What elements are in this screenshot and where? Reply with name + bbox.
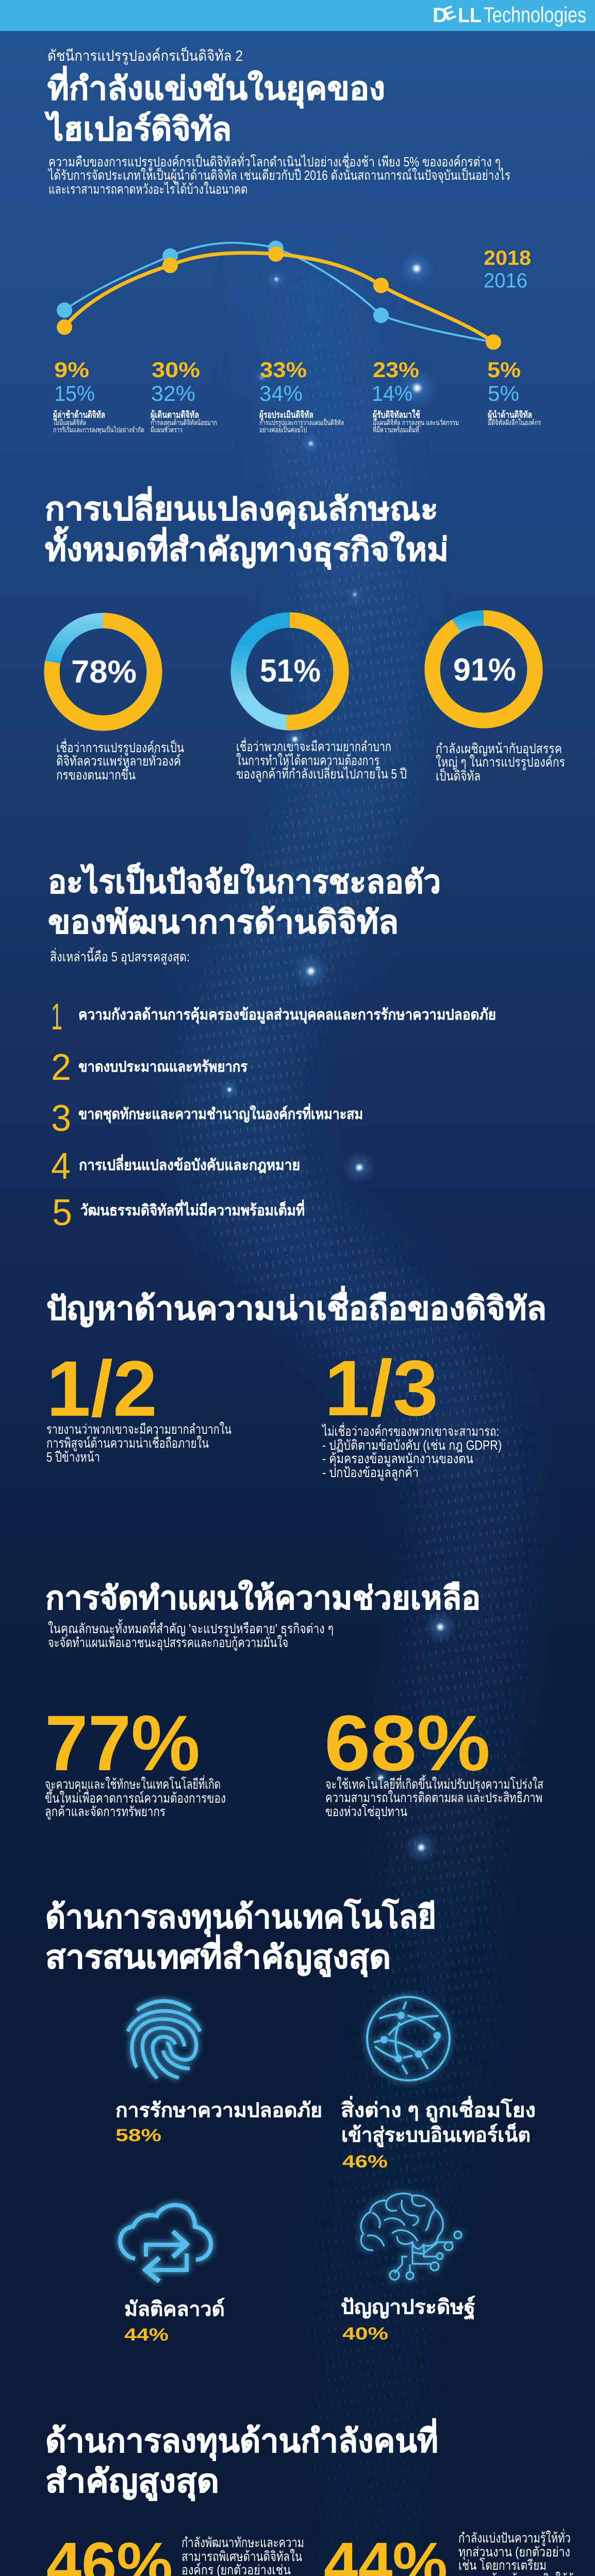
- maturity stage: digital followers: การลงทุนด้านดิจิทัลน้อยมาก: [151, 418, 217, 427]
- stat: one third: [321, 1344, 502, 1481]
- maturity stage: digital followers: [151, 358, 217, 434]
- icon: AI brain: [361, 2193, 461, 2280]
- stat: 68%: ของห่วงโซ่อุปทาน: [325, 1804, 407, 1820]
- stat: one third: - ปกป้องข้อมูลลูกค้า: [322, 1465, 419, 1481]
- maturity stage: digital leaders: ผู้นำด้านดิจิทัล: [488, 410, 532, 421]
- maturity stage: digital followers: ผู้เดินตามดิจิทัล: [151, 410, 199, 421]
- label: multi-cloud: มัลติคลาวด์: [124, 2297, 225, 2320]
- icon: multi-cloud: [120, 2205, 211, 2281]
- maturity stage: digital laggards: [53, 358, 144, 434]
- barrier 1: 1: [51, 996, 62, 1038]
- header bar: [0, 0, 595, 31]
- section heading: digital trust: ปัญหาด้านความน่าเชื่อถือของดิจิทัล: [46, 1286, 547, 1327]
- stat: one half: การพิสูจน์ด้านความน่าเชื่อถือภายใน: [46, 1434, 209, 1451]
- intro paragraph: ความคืบของการแปรรูปองค์กรเป็นดิจิทัลทั่วโลกดำเนินไปอย่างเชื่องช้า เพียง 5% ขององค์กรต่าง ๆ: [48, 152, 501, 170]
- maturity stage: digital laggards: 9%: [54, 358, 89, 382]
- section heading: IT investments: [45, 1898, 436, 1977]
- icon: connected network globe: [367, 1997, 450, 2080]
- stat: 44%: [323, 2529, 574, 2576]
- section intro: ในคุณลักษณะทั้งหมดที่สำคัญ 'จะแปรรูปหรือตาย' ธุรกิจต่าง ๆ: [48, 1619, 334, 1637]
- legend: [484, 247, 531, 292]
- maturity stage: digital laggards: ผู้ล่าช้าด้านดิจิทัล: [53, 410, 105, 421]
- maturity stage: digital laggards: การริเริ่มและการลงทุนเป็นไปอย่างจำกัด: [53, 425, 144, 434]
- section heading: IT investments: ด้านการลงทุนด้านเทคโนโลยี: [45, 1898, 436, 1937]
- section heading: workforce investments: [45, 2418, 438, 2501]
- donut caption 51%: ของลูกค้าที่กำลังเปลี่ยนไปภายใน 5 ปี: [236, 765, 407, 782]
- donut chart: 78%: 78%: [71, 654, 137, 690]
- label: security: 58%: [115, 2126, 161, 2145]
- maturity stage: digital evaluators: [259, 358, 344, 434]
- donut chart: 51%: 51%: [260, 653, 321, 689]
- stat: one half: 1/2: [46, 1345, 157, 1433]
- label: artificial intelligence: 40%: [342, 2324, 388, 2344]
- barrier 4: 4: [51, 1146, 71, 1187]
- maturity stage: digital evaluators: 33%: [260, 358, 307, 382]
- label: security: [115, 2099, 322, 2145]
- label: artificial intelligence: ปัญญาประดิษฐ์: [341, 2295, 475, 2320]
- donut caption 91%: [436, 741, 565, 784]
- stat: one half: รายงานว่าพวกเขาจะมีความยากลำบากใน: [46, 1421, 232, 1437]
- label: multi-cloud: [124, 2297, 225, 2345]
- section heading: IT investments: สารสนเทศที่สำคัญสูงสุด: [45, 1935, 391, 1977]
- intro paragraph: และเราสามารถคาดหวังอะไรได้บ้างในอนาคต: [48, 181, 247, 197]
- donut caption 51%: ในการทำให้ได้ตามความต้องการ: [236, 753, 379, 768]
- stat: one third: - ปฏิบัติตามข้อบังคับ (เช่น กฎ GDPR): [322, 1437, 502, 1453]
- icon: fingerprint: [128, 2001, 200, 2078]
- maturity stage: digital evaluators: อย่างค่อยเป็นค่อยไป: [259, 425, 307, 434]
- stat: one half: 5 ปีข้างหน้า: [46, 1449, 100, 1465]
- stat: 77%: จะควบคุมและใช้ทักษะในเทคโนโลยีที่เกิด: [45, 1775, 221, 1792]
- maturity stage: digital adopters: [372, 358, 459, 434]
- donut caption 78%: กรของตนมากขึ้น: [56, 765, 136, 783]
- stat: 46%: สามารถพิเศษด้านดิจิทัลใน: [181, 2549, 302, 2564]
- kicker: ดัชนีการแปรรูปองค์กรเป็นดิจิทัล 2: [47, 46, 243, 65]
- label: internet of things: สิ่งต่าง ๆ ถูกเชื่อมโยง: [341, 2096, 536, 2123]
- legend: 2016: [484, 269, 527, 292]
- stat: 77%: ขึ้นใหม่เพื่อคาดการณ์ความต้องการของ: [45, 1788, 226, 1806]
- section heading: workforce investments: ด้านการลงทุนด้านกำลังคนที่: [45, 2418, 438, 2461]
- barrier 2: [51, 1047, 247, 1088]
- stat: one half: [46, 1345, 232, 1465]
- barrier 4: [51, 1146, 300, 1187]
- maturity stage: digital adopters: ที่มีความพร้อมเต็มที่: [373, 425, 419, 434]
- Dell Technologies logo: [433, 1, 586, 27]
- maturity stage: digital adopters: มีแผนดิจิทัล การลงทุน และนวัตกรรม: [373, 418, 459, 427]
- donut chart: 78%: [52, 620, 155, 723]
- maturity stage: digital adopters: 23%: [373, 358, 419, 382]
- label: artificial intelligence: [341, 2295, 475, 2344]
- maturity stage: digital evaluators: 34%: [259, 381, 303, 405]
- donut caption 91%: เป็นดิจิทัล: [436, 768, 481, 784]
- stat: one third: ไม่เชื่อว่าองค์กรของพวกเขาจะสามารถ:: [321, 1422, 499, 1439]
- stat: 44%: เช่น โดยการเตรียม: [458, 2557, 547, 2573]
- section heading: business transformation: [45, 486, 449, 569]
- section heading: what slows digital progress: [48, 862, 441, 940]
- Dell Technologies logo: LL: [458, 4, 482, 27]
- list intro: สิ่งเหล่านี้คือ 5 อุปสรรคสูงสุด:: [50, 947, 190, 965]
- label: security: การรักษาความปลอดภัย: [115, 2099, 322, 2122]
- barrier 1: ความกังวลด้านการคุ้มครองข้อมูลส่วนบุคคลและการรักษาความปลอดภัย: [78, 1007, 496, 1024]
- label: internet of things: [341, 2096, 536, 2172]
- label: multi-cloud: 44%: [124, 2325, 169, 2345]
- donut caption 78%: เชื่อว่าการแปรรูปองค์กรเป็น: [56, 738, 184, 756]
- donut caption 51%: เชื่อว่าพวกเขาจะมีความยากลำบาก: [236, 737, 391, 754]
- stat: 68%: [324, 1699, 543, 1820]
- section heading: business transformation: ทั้งหมดที่สำคัญทางธุรกิจใหม่: [45, 526, 449, 569]
- maturity stage: digital leaders: มีดิจิทัลฝังลึกในองค์กร: [488, 418, 541, 427]
- barrier 5: วัฒนธรรมดิจิทัลที่ไม่มีความพร้อมเต็มที่: [80, 1199, 305, 1219]
- stat: 77%: 77%: [45, 1699, 200, 1787]
- donut caption 78%: [56, 738, 184, 783]
- stat: 77%: [45, 1699, 226, 1820]
- intro paragraph: [47, 152, 510, 197]
- line chart: digital maturity 2016 vs 2018: [57, 241, 531, 350]
- donut chart: 91%: 91%: [453, 652, 516, 688]
- barrier 3: [51, 1098, 363, 1139]
- maturity stage: digital leaders: 5%: [487, 358, 521, 382]
- maturity stage: digital evaluators: ผู้รอประเมินดิจิทัล: [259, 410, 313, 421]
- stat: 46%: [46, 2530, 308, 2576]
- barrier 2: ขาดงบประมาณและทรัพยากร: [78, 1059, 247, 1075]
- barrier 1: [51, 996, 496, 1038]
- main title: [44, 66, 385, 147]
- section heading: action plan: การจัดทำแผนให้ความช่วยเหลือ: [45, 1580, 481, 1616]
- donut caption 91%: กำลังเผชิญหน้ากับอุปสรรค: [436, 741, 562, 757]
- stat: 44%: ทุกส่วนงาน (ยกตัวอย่าง: [458, 2544, 570, 2560]
- donut caption 78%: ดิจิทัลควรแพร่หลายทั่วองค์: [56, 752, 181, 769]
- section heading: what slows digital progress: อะไรเป็นปัจจัยในการชะลอตัว: [48, 862, 441, 900]
- 2016 line: [57, 241, 493, 342]
- Dell Technologies logo: E: [440, 1, 458, 25]
- intro section: [44, 46, 510, 197]
- Dell Technologies logo: D: [433, 4, 448, 27]
- stat: one third: 1/3: [324, 1344, 438, 1432]
- stat: one third: - คุ้มครองข้อมูลพนักงานของตน: [322, 1451, 473, 1467]
- maturity stage: digital adopters: 14%: [372, 381, 412, 405]
- main title: ที่กำลังแข่งขันในยุคของ: [47, 66, 385, 108]
- main title: ไฮเปอร์ดิจิทัล: [44, 111, 232, 147]
- label: internet of things: 46%: [342, 2152, 388, 2172]
- stat: 68%: 68%: [324, 1699, 490, 1787]
- maturity stage: digital followers: มีแผนชั่วคราว: [151, 425, 183, 434]
- maturity stage: digital laggards: ไม่มีแผนดิจิทัล: [53, 418, 86, 427]
- donut chart: 51%: [238, 620, 341, 722]
- maturity stage: digital leaders: 5%: [488, 381, 519, 405]
- maturity stage: digital followers: 30%: [152, 358, 200, 382]
- barrier 5: 5: [52, 1192, 72, 1233]
- maturity stage: digital followers: 32%: [151, 381, 195, 405]
- barrier 3: 3: [51, 1098, 71, 1139]
- section heading: workforce investments: สำคัญสูงสุด: [45, 2464, 219, 2501]
- maturity stage: digital leaders: [487, 358, 541, 427]
- barrier 2: 2: [51, 1047, 71, 1088]
- section intro: จะจัดทำแผนเพื่อเอาชนะอุปสรรคและกอบกู้ความมั่นใจ: [48, 1633, 288, 1651]
- 2018 line: [57, 246, 501, 350]
- stat: 77%: ลูกค้าและจัดการทรัพยากร: [45, 1804, 166, 1820]
- maturity stage: digital laggards: 15%: [54, 381, 95, 405]
- donut caption 91%: ใหญ่ ๆ ในการแปรรูปองค์กร: [436, 754, 565, 770]
- stat: 46%: กำลังพัฒนาทักษะและความ: [181, 2535, 304, 2550]
- barrier 4: การเปลี่ยนแปลงข้อบังคับและกฎหมาย: [79, 1154, 300, 1174]
- label: internet of things: เข้าสู่ระบบอินเทอร์เน็ต: [341, 2123, 531, 2147]
- section heading: what slows digital progress: ของพัฒนาการด้านดิจิทัล: [48, 905, 399, 940]
- maturity stage: digital adopters: ผู้รับดิจิทัลมาใช้: [373, 409, 420, 421]
- barrier 3: ขาดชุดทักษะและความชำนาญในองค์กรที่เหมาะสม: [78, 1103, 363, 1123]
- section intro: [48, 1619, 334, 1651]
- maturity stage: digital evaluators: การแปรรูปและการวางแผนเป็นดิจิทัล: [259, 418, 344, 427]
- donut chart: 91%: [432, 618, 535, 720]
- barrier 5: [52, 1192, 305, 1233]
- donut caption 51%: [236, 737, 407, 782]
- section heading: business transformation: การเปลี่ยนแปลงคุณลักษณะ: [45, 486, 438, 529]
- legend: 2018: [484, 247, 531, 269]
